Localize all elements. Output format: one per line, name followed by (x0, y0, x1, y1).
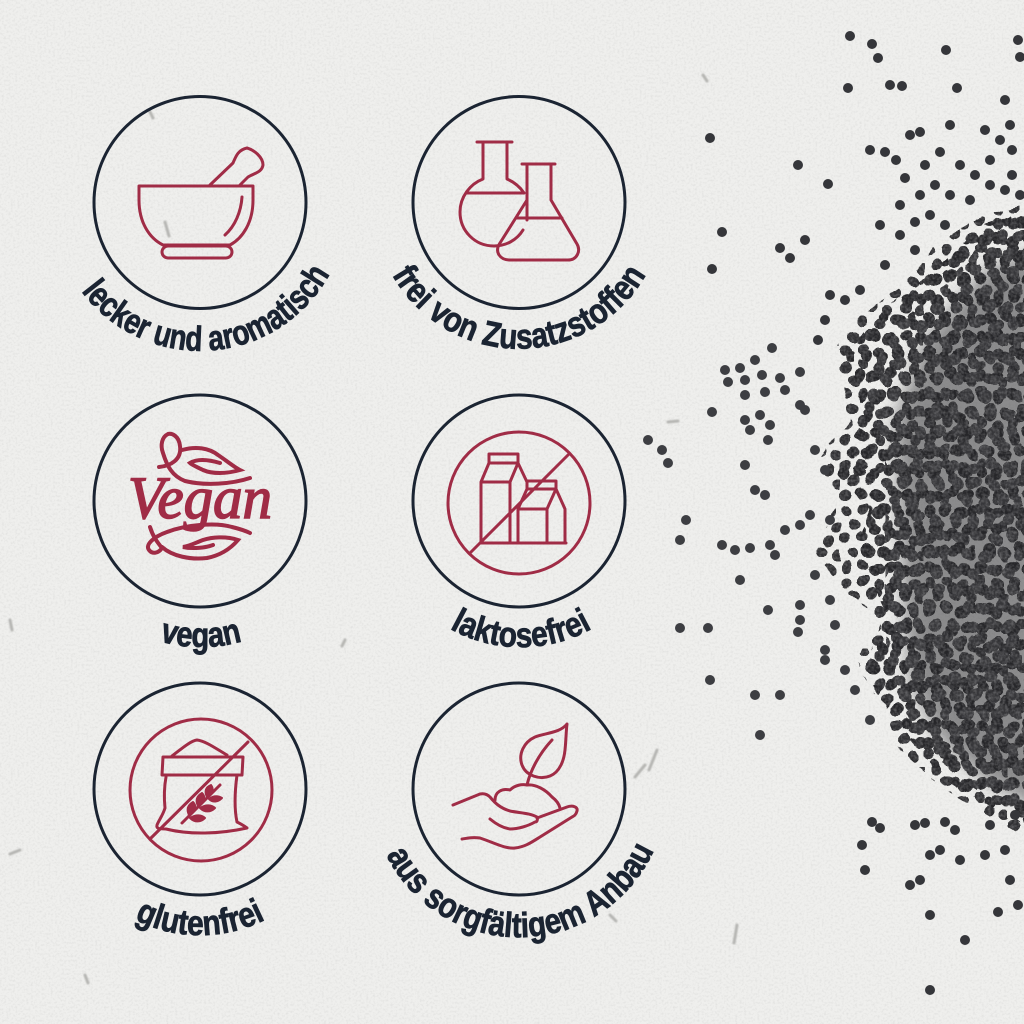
icon: vegan lettering (128, 434, 272, 559)
panel: aus sorgfältigem Anbau (388, 682, 654, 944)
icon: crossed-out grain sack (130, 719, 272, 861)
icon: crossed-out milk cartons (448, 432, 590, 574)
icon: mortar and pestle (139, 148, 263, 258)
label: frei von Zusatzstoffen: frei von Zusatzstoffen (392, 264, 646, 350)
icon: hand holding seedling (453, 724, 577, 848)
label: aus sorgfältigem Anbau: aus sorgfältigem Anbau (388, 843, 654, 944)
label: vegan: vegan (164, 622, 241, 655)
poppy seed pile (812, 200, 1024, 845)
label: glutenfrei: glutenfrei (134, 897, 264, 936)
label: laktosefrei: laktosefrei (451, 606, 591, 648)
panel: laktosefrei (412, 394, 626, 648)
icon: vegan lettering: Vegan (128, 465, 272, 531)
icon: laboratory flasks (460, 142, 579, 260)
panel: glutenfrei (92, 682, 308, 936)
panel: vegan (92, 394, 308, 655)
panel: frei von Zusatzstoffen (392, 95, 646, 350)
panel: lecker und aromatisch (82, 95, 330, 352)
label: lecker und aromatisch: lecker und aromatisch (82, 267, 330, 352)
scattered poppy seeds (648, 36, 1020, 990)
